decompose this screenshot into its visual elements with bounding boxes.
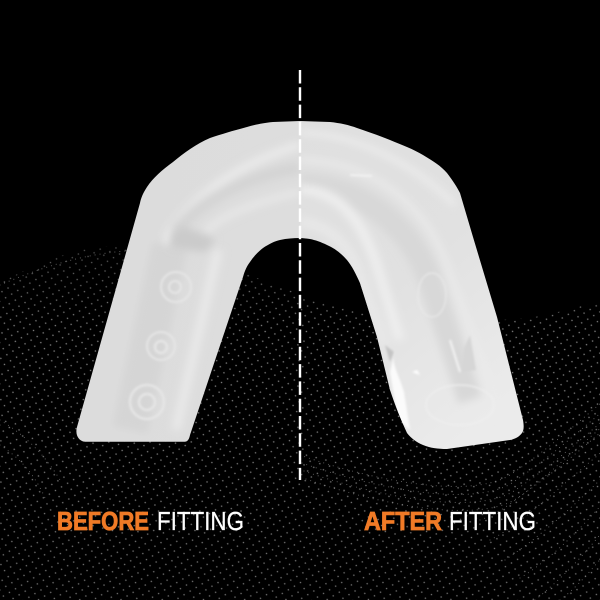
mouthguard: before fitting half: [76, 121, 300, 442]
mouthguard: after fitting half: [300, 121, 524, 449]
dotted wave background: [0, 230, 600, 600]
centre dashed divider: [299, 70, 301, 480]
label: after fitting: FITTING: [449, 506, 536, 536]
socket notch: [170, 228, 212, 252]
label: before fitting: FITTING: [157, 506, 244, 536]
label: after fitting: AFTER: [364, 506, 442, 536]
label: before fitting: [57, 506, 244, 536]
moulding circles: [129, 271, 182, 420]
inner contour shading: [175, 145, 295, 426]
label: after fitting: [364, 506, 536, 536]
formed impressions and highlights: [352, 174, 476, 428]
label: before fitting: BEFORE: [57, 506, 149, 536]
